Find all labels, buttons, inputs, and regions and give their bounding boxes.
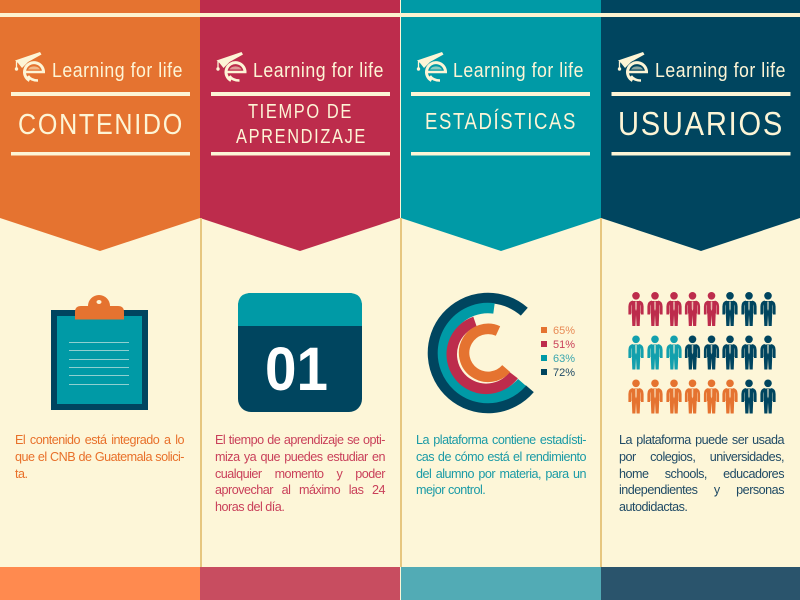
- text block: tiempo: horas del día.: [215, 500, 284, 514]
- header: logo and title: [612, 52, 790, 156]
- banner: orange header: [0, 0, 200, 251]
- text block: usuarios: independientes y personas: [619, 483, 784, 497]
- text block: estadísticas: del alumno por materia, para un: [416, 467, 586, 481]
- header: logo and title: APRENDIZAJE: [236, 126, 367, 148]
- text block: usuarios: autodidactas.: [619, 500, 687, 514]
- icon: clipboard: [51, 295, 148, 410]
- text block: estadísticas: mejor control.: [416, 483, 485, 497]
- banner: teal header: [401, 0, 601, 251]
- header: logo and title: Learning for life: [453, 60, 584, 82]
- text block: contenido: [15, 433, 184, 481]
- top cream stripe: [0, 13, 800, 17]
- chart legend: 63%: [553, 353, 575, 365]
- chart legend: 51%: [553, 339, 575, 351]
- text block: contenido: El contenido está integrado a lo: [15, 433, 184, 447]
- header: logo and title: CONTENIDO: [18, 109, 184, 141]
- text block: tiempo: cualquier momento y poder: [215, 467, 385, 481]
- text block: contenido: que el CNB de Guatemala solici-: [15, 450, 184, 464]
- text block: tiempo: aprovechar al máximo las 24: [215, 483, 385, 497]
- footer bar: orange: [0, 567, 200, 600]
- text block: usuarios: La plataforma puede ser usada: [619, 433, 784, 447]
- header: logo and title: [411, 52, 590, 156]
- header: logo and title: [211, 52, 390, 156]
- text block: estadísticas: [416, 433, 586, 497]
- header: logo and title: ESTADÍSTICAS: [425, 108, 577, 134]
- text block: usuarios: por colegios, universidades,: [619, 450, 784, 464]
- header: logo and title: Learning for life: [253, 60, 384, 82]
- header: logo and title: Learning for life: [655, 60, 786, 82]
- row 1 people: [630, 292, 774, 326]
- divider: [200, 218, 202, 567]
- panel: tiempo de aprendizaje: [200, 0, 400, 600]
- panel: estadísticas: [400, 0, 601, 600]
- chart legend: [541, 325, 575, 379]
- header: logo and title: TIEMPO DE: [248, 101, 353, 123]
- row 2 people: [630, 336, 774, 370]
- text block: estadísticas: cas de cómo está el rendimiento: [416, 450, 586, 464]
- footer bar: navy: [601, 567, 800, 600]
- header: logo and title: Learning for life: [52, 60, 183, 82]
- banner: crimson header: [200, 0, 400, 251]
- footer bar: crimson: [200, 567, 400, 600]
- chart: concentric radial bars: [428, 292, 534, 414]
- text block: estadísticas: La plataforma contiene estadísti-: [416, 433, 586, 447]
- text block: usuarios: home schools, educadores: [619, 467, 784, 481]
- row 3 people: [630, 380, 774, 414]
- text block: usuarios: [619, 433, 784, 514]
- header: logo and title: [11, 52, 190, 156]
- icon: calendar: 01: [265, 335, 328, 403]
- text block: tiempo: miza ya que puedes estudiar en: [215, 450, 385, 464]
- chart legend: 65%: [553, 325, 575, 337]
- text block: tiempo: [215, 433, 386, 514]
- text block: contenido: ta.: [15, 467, 28, 481]
- icon: people pictogram: [628, 292, 776, 414]
- icon: calendar: [238, 293, 362, 412]
- divider: [400, 218, 402, 567]
- panel: contenido: [0, 0, 200, 600]
- divider: [600, 218, 602, 567]
- panel: usuarios: [600, 0, 800, 600]
- footer bar: teal: [401, 567, 601, 600]
- chart legend: 72%: [553, 367, 575, 379]
- banner: navy header: [601, 0, 800, 251]
- text block: tiempo: El tiempo de aprendizaje se opti-: [215, 433, 385, 447]
